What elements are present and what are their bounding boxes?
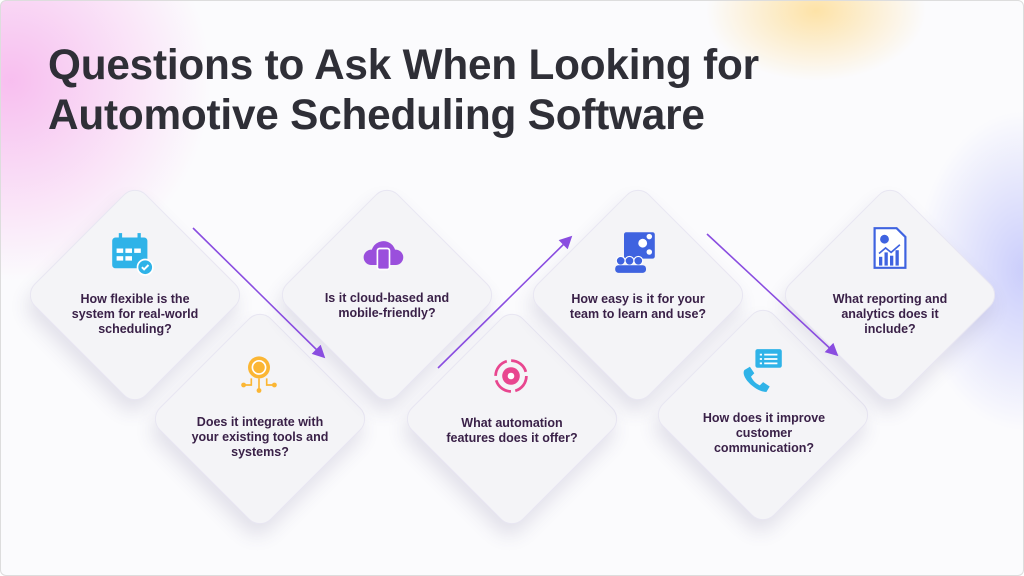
- icon: automation: [494, 359, 528, 393]
- text: communication: How does it improve customer communication?: [703, 411, 825, 455]
- icon: report: [874, 227, 906, 269]
- icon: calendar: [112, 233, 154, 276]
- panel: reporting: [778, 183, 1002, 407]
- title: Questions to Ask When Looking for: [48, 41, 759, 88]
- panel: easy: [526, 183, 750, 407]
- text: reporting: What reporting and analytics does it include?: [833, 292, 947, 336]
- title: [48, 41, 759, 138]
- arrow 3: [707, 234, 836, 354]
- text: flexible: How flexible is the system for real-world scheduling?: [72, 292, 198, 336]
- text: integrate: Does it integrate with your existing tools and systems?: [192, 415, 328, 459]
- text: easy: How easy is it for your team to learn and use?: [570, 292, 706, 321]
- arrow 2: [438, 238, 570, 368]
- icon: team training: [615, 232, 655, 273]
- text: automation: What automation features does it offer?: [446, 416, 578, 445]
- icon: cloud: [364, 241, 404, 270]
- panel: flexible: [23, 183, 247, 407]
- icon: phone chat: [744, 349, 782, 392]
- text: cloud: Is it cloud-based and mobile-friendly?: [325, 291, 449, 320]
- title: Automotive Scheduling Software: [48, 91, 705, 138]
- icon: gear network: [241, 356, 277, 393]
- panel: automation: [400, 307, 624, 531]
- panel: cloud: [275, 183, 499, 407]
- panel: integrate: [148, 307, 372, 531]
- arrow 1: [193, 228, 323, 356]
- panel: communication: [651, 303, 875, 527]
